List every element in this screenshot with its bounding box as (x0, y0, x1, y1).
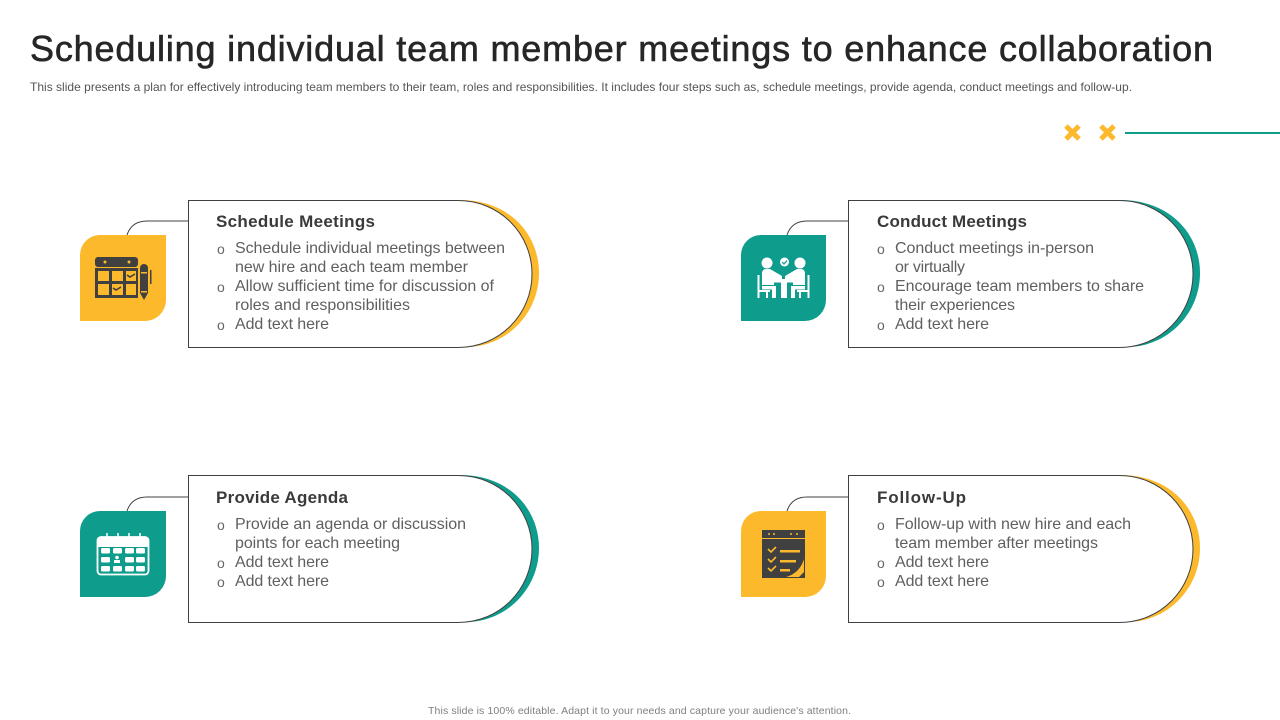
card bullet list: Conduct meetings in-person (895, 240, 1094, 257)
card bullet list: Provide an agenda or discussion (235, 516, 466, 533)
subtitle: This slide presents a plan for effectively introducing team members to their team, roles and responsibilities. It includes four steps such as, schedule meetings, provide agenda, conduct meetings and follow-up. (30, 80, 1132, 94)
connector (127, 221, 188, 235)
card bullet list: team member after meetings (895, 535, 1098, 552)
card bullet list (877, 240, 1144, 333)
card bullet list: o (877, 317, 885, 333)
icon tile: teal meeting (741, 235, 826, 321)
card bullet list: Follow-up with new hire and each (895, 516, 1131, 533)
card bullet list: Add text here (895, 554, 989, 571)
card bullet list: roles and responsibilities (235, 297, 410, 314)
panel: Provide Agenda (80, 475, 539, 622)
panel: Schedule Meetings (80, 200, 539, 348)
card bullet list: or virtually (895, 259, 965, 276)
decoration: crosses and teal line (1066, 126, 1280, 139)
icon tile: yellow checklist (741, 511, 826, 597)
connector (787, 221, 848, 235)
card bullet list: Add text here (235, 573, 329, 590)
card bullet list: Add text here (895, 316, 989, 333)
card bullet list: o (217, 317, 225, 333)
card crescent: yellow (460, 200, 539, 347)
card bullet list: o (217, 574, 225, 590)
card heading: Schedule Meetings (216, 212, 375, 231)
card bullet list: Add text here (235, 316, 329, 333)
card bullet list: o (877, 574, 885, 590)
card bullet list: o (217, 555, 225, 571)
card bullet list: o (217, 241, 225, 257)
card heading: Provide Agenda (216, 488, 349, 507)
card outline (848, 200, 1193, 348)
card bullet list (217, 240, 505, 333)
card heading: Conduct Meetings (877, 212, 1027, 231)
card bullet list: o (877, 555, 885, 571)
card bullet list (877, 516, 1131, 590)
card bullet list: their experiences (895, 297, 1015, 314)
footer note: This slide is 100% editable. Adapt it to your needs and capture your audience's attention. (428, 705, 851, 717)
card bullet list: Add text here (235, 554, 329, 571)
card bullet list: Add text here (895, 573, 989, 590)
card bullet list: o (217, 517, 225, 533)
card crescent: teal (1120, 200, 1200, 347)
panel: Conduct Meetings (741, 200, 1200, 348)
card bullet list: Schedule individual meetings between (235, 240, 505, 257)
card bullet list: Encourage team members to share (895, 278, 1144, 295)
card crescent: yellow (1120, 475, 1200, 622)
card bullet list: o (877, 241, 885, 257)
card bullet list (217, 516, 466, 590)
card bullet list: Allow sufficient time for discussion of (235, 278, 495, 295)
card outline (188, 476, 532, 622)
card bullet list: o (877, 279, 885, 295)
card outline (188, 200, 532, 348)
title: Scheduling individual team member meetings to enhance collaboration (30, 28, 1213, 69)
card outline (848, 476, 1193, 622)
card bullet list: o (217, 279, 225, 295)
icon tile: yellow calendar and pencil (80, 235, 166, 321)
card crescent: teal (460, 475, 539, 622)
connector (127, 497, 188, 511)
icon tile: teal calendar (80, 511, 166, 597)
card bullet list: points for each meeting (235, 535, 400, 552)
panel: Follow-Up (741, 475, 1200, 622)
card bullet list: new hire and each team member (235, 259, 469, 276)
connector (787, 497, 848, 511)
card heading: Follow-Up (877, 488, 966, 507)
card bullet list: o (877, 517, 885, 533)
